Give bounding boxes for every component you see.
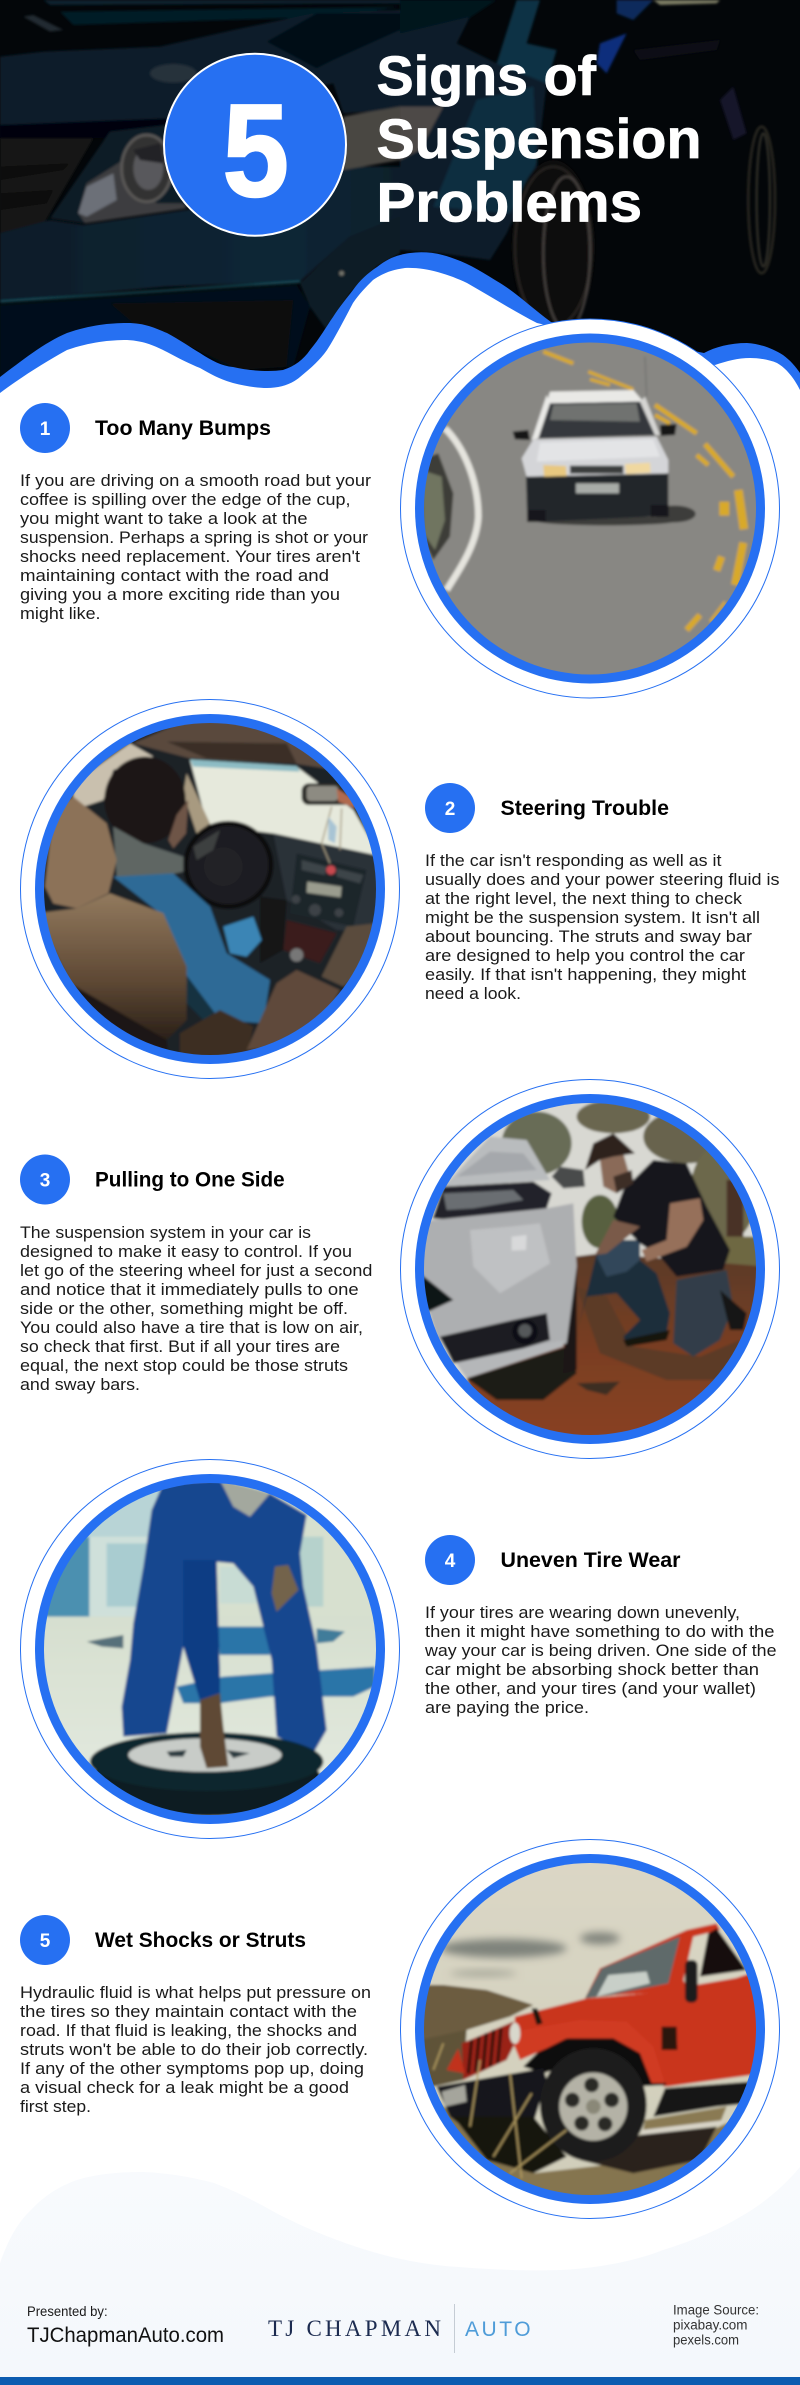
number badge 5 bbox=[20, 1915, 70, 1965]
body text 3: and notice that it immediately pulls to one bbox=[20, 1281, 359, 1299]
number badge 3: 3 bbox=[40, 1170, 50, 1192]
body text 3: The suspension system in your car is bbox=[20, 1224, 311, 1242]
body text 4: way your car is being driven. One side of the bbox=[424, 1642, 776, 1660]
footer presenter credit: TJChapmanAuto.com bbox=[27, 2324, 224, 2347]
body text 4: are paying the price. bbox=[425, 1699, 589, 1717]
bottom blue bar bbox=[0, 2377, 800, 2385]
title: Signs of bbox=[376, 44, 596, 107]
panel 5: wet shocks or struts text bbox=[20, 1915, 371, 2116]
image source credit: pexels.com bbox=[673, 2332, 739, 2348]
body text 1: giving you a more exciting ride than you bbox=[20, 586, 340, 604]
body text 3: equal, the next stop could be those struts bbox=[20, 1357, 348, 1375]
body text 4: then it might have something to do with the bbox=[425, 1623, 774, 1641]
photo circle 5: red jeep bbox=[400, 1840, 780, 2218]
body text 1: you might want to take a look at the bbox=[20, 510, 308, 528]
body text 5: Hydraulic fluid is what helps put pressure on bbox=[20, 1984, 371, 2002]
panel 1: too many bumps text bbox=[20, 403, 372, 623]
body text 5: the tires so they maintain contact with the bbox=[20, 2003, 357, 2021]
footer presenter credit: Presented by: bbox=[27, 2304, 108, 2319]
big number badge bbox=[164, 54, 346, 236]
body text 2: If the car isn't responding as well as it bbox=[425, 852, 722, 870]
body text 1 bbox=[20, 472, 372, 623]
image source credit: pixabay.com bbox=[673, 2318, 748, 2332]
body text 1: maintaining contact with the road and bbox=[20, 567, 329, 585]
body text 3: so check that first. But if all your tires are bbox=[20, 1338, 340, 1356]
body text 2: usually does and your power steering fluid is bbox=[425, 871, 780, 889]
body text 2: at the right level, the next thing to check bbox=[425, 890, 743, 908]
number badge 2 bbox=[425, 783, 475, 833]
panel 4: uneven tire wear text bbox=[424, 1535, 776, 1717]
body text 3: designed to make it easy to control. If you bbox=[20, 1243, 352, 1261]
body text 2: about bouncing. The struts and sway bar bbox=[425, 928, 753, 946]
body text 5: first step. bbox=[20, 2098, 91, 2116]
body text 3 bbox=[20, 1224, 372, 1394]
image source credit bbox=[673, 2302, 759, 2348]
number badge 5: 5 bbox=[40, 1931, 51, 1952]
body text 4 bbox=[424, 1604, 776, 1717]
body text 1: If you are driving on a smooth road but your bbox=[20, 472, 372, 490]
body text 3: and sway bars. bbox=[20, 1376, 140, 1394]
footer presenter credit bbox=[27, 2304, 224, 2347]
number badge 4 bbox=[425, 1535, 475, 1585]
panel 3: pulling to one side text bbox=[20, 1154, 372, 1394]
number badge 4: 4 bbox=[445, 1551, 456, 1572]
body text 3: You could also have a tire that is low on air, bbox=[20, 1319, 363, 1337]
number badge 2: 2 bbox=[445, 799, 455, 820]
company logo: AUTO bbox=[465, 2318, 531, 2341]
body text 4: If your tires are wearing down unevenly, bbox=[425, 1604, 740, 1622]
body text 4: the other, and your tires (and your wallet) bbox=[425, 1680, 756, 1698]
title: Problems bbox=[376, 170, 642, 234]
photo circle 1: car on road bbox=[400, 319, 780, 698]
body text 5 bbox=[20, 1984, 371, 2116]
body text 1: might like. bbox=[20, 605, 100, 623]
company logo: TJ CHAPMAN bbox=[268, 2316, 441, 2341]
body text 5: struts won't be able to do their job correctly. bbox=[20, 2041, 368, 2059]
body text 1: suspension. Perhaps a spring is shot or your bbox=[20, 529, 369, 547]
body text 1: shocks need replacement. Your tires aren't bbox=[20, 548, 360, 566]
image source credit: Image Source: bbox=[673, 2302, 759, 2318]
body text 3: let go of the steering wheel for just a second bbox=[20, 1262, 372, 1280]
body text 5: road. If that fluid is leaking, the shocks and bbox=[20, 2022, 357, 2040]
number badge 3 bbox=[20, 1154, 70, 1204]
heading 5: Wet Shocks or Struts bbox=[95, 1929, 306, 1952]
number badge 1 bbox=[20, 403, 70, 453]
body text 3: side or the other, something might be off. bbox=[20, 1300, 348, 1318]
company logo bbox=[268, 2304, 531, 2353]
heading 4: Uneven Tire Wear bbox=[500, 1549, 680, 1572]
heading 2: Steering Trouble bbox=[500, 797, 669, 820]
decorative blue wave edge bbox=[0, 252, 800, 430]
body text 2: easily. If that isn't happening, they might bbox=[425, 966, 746, 984]
hero background photo: dark car bbox=[0, 0, 800, 430]
body text 2: need a look. bbox=[425, 985, 521, 1003]
photo circle 4: mechanic lifting tire bbox=[20, 1460, 400, 1838]
footer background wave bbox=[0, 2167, 800, 2385]
photo circle 3: man checking tire bbox=[400, 1080, 780, 1458]
heading 1: Too Many Bumps bbox=[95, 417, 271, 440]
title bbox=[376, 44, 702, 234]
photo circle 2: driver inside car bbox=[20, 700, 400, 1078]
body text 4: car might be absorbing shock better than bbox=[425, 1661, 759, 1679]
title: Suspension bbox=[376, 107, 702, 170]
heading 3: Pulling to One Side bbox=[95, 1168, 285, 1192]
big number badge: 5 bbox=[222, 77, 289, 224]
body text 5: a visual check for a leak might be a good bbox=[20, 2079, 349, 2097]
body text 2 bbox=[425, 852, 780, 1003]
number badge 1: 1 bbox=[40, 419, 51, 440]
body text 2: might be the suspension system. It isn't all bbox=[425, 909, 760, 927]
body text 1: coffee is spilling over the edge of the cup, bbox=[20, 491, 350, 509]
body text 5: If any of the other symptoms pop up, doing bbox=[20, 2060, 364, 2078]
body text 2: are designed to help you control the car bbox=[425, 947, 746, 965]
panel 2: steering trouble text bbox=[425, 783, 780, 1003]
